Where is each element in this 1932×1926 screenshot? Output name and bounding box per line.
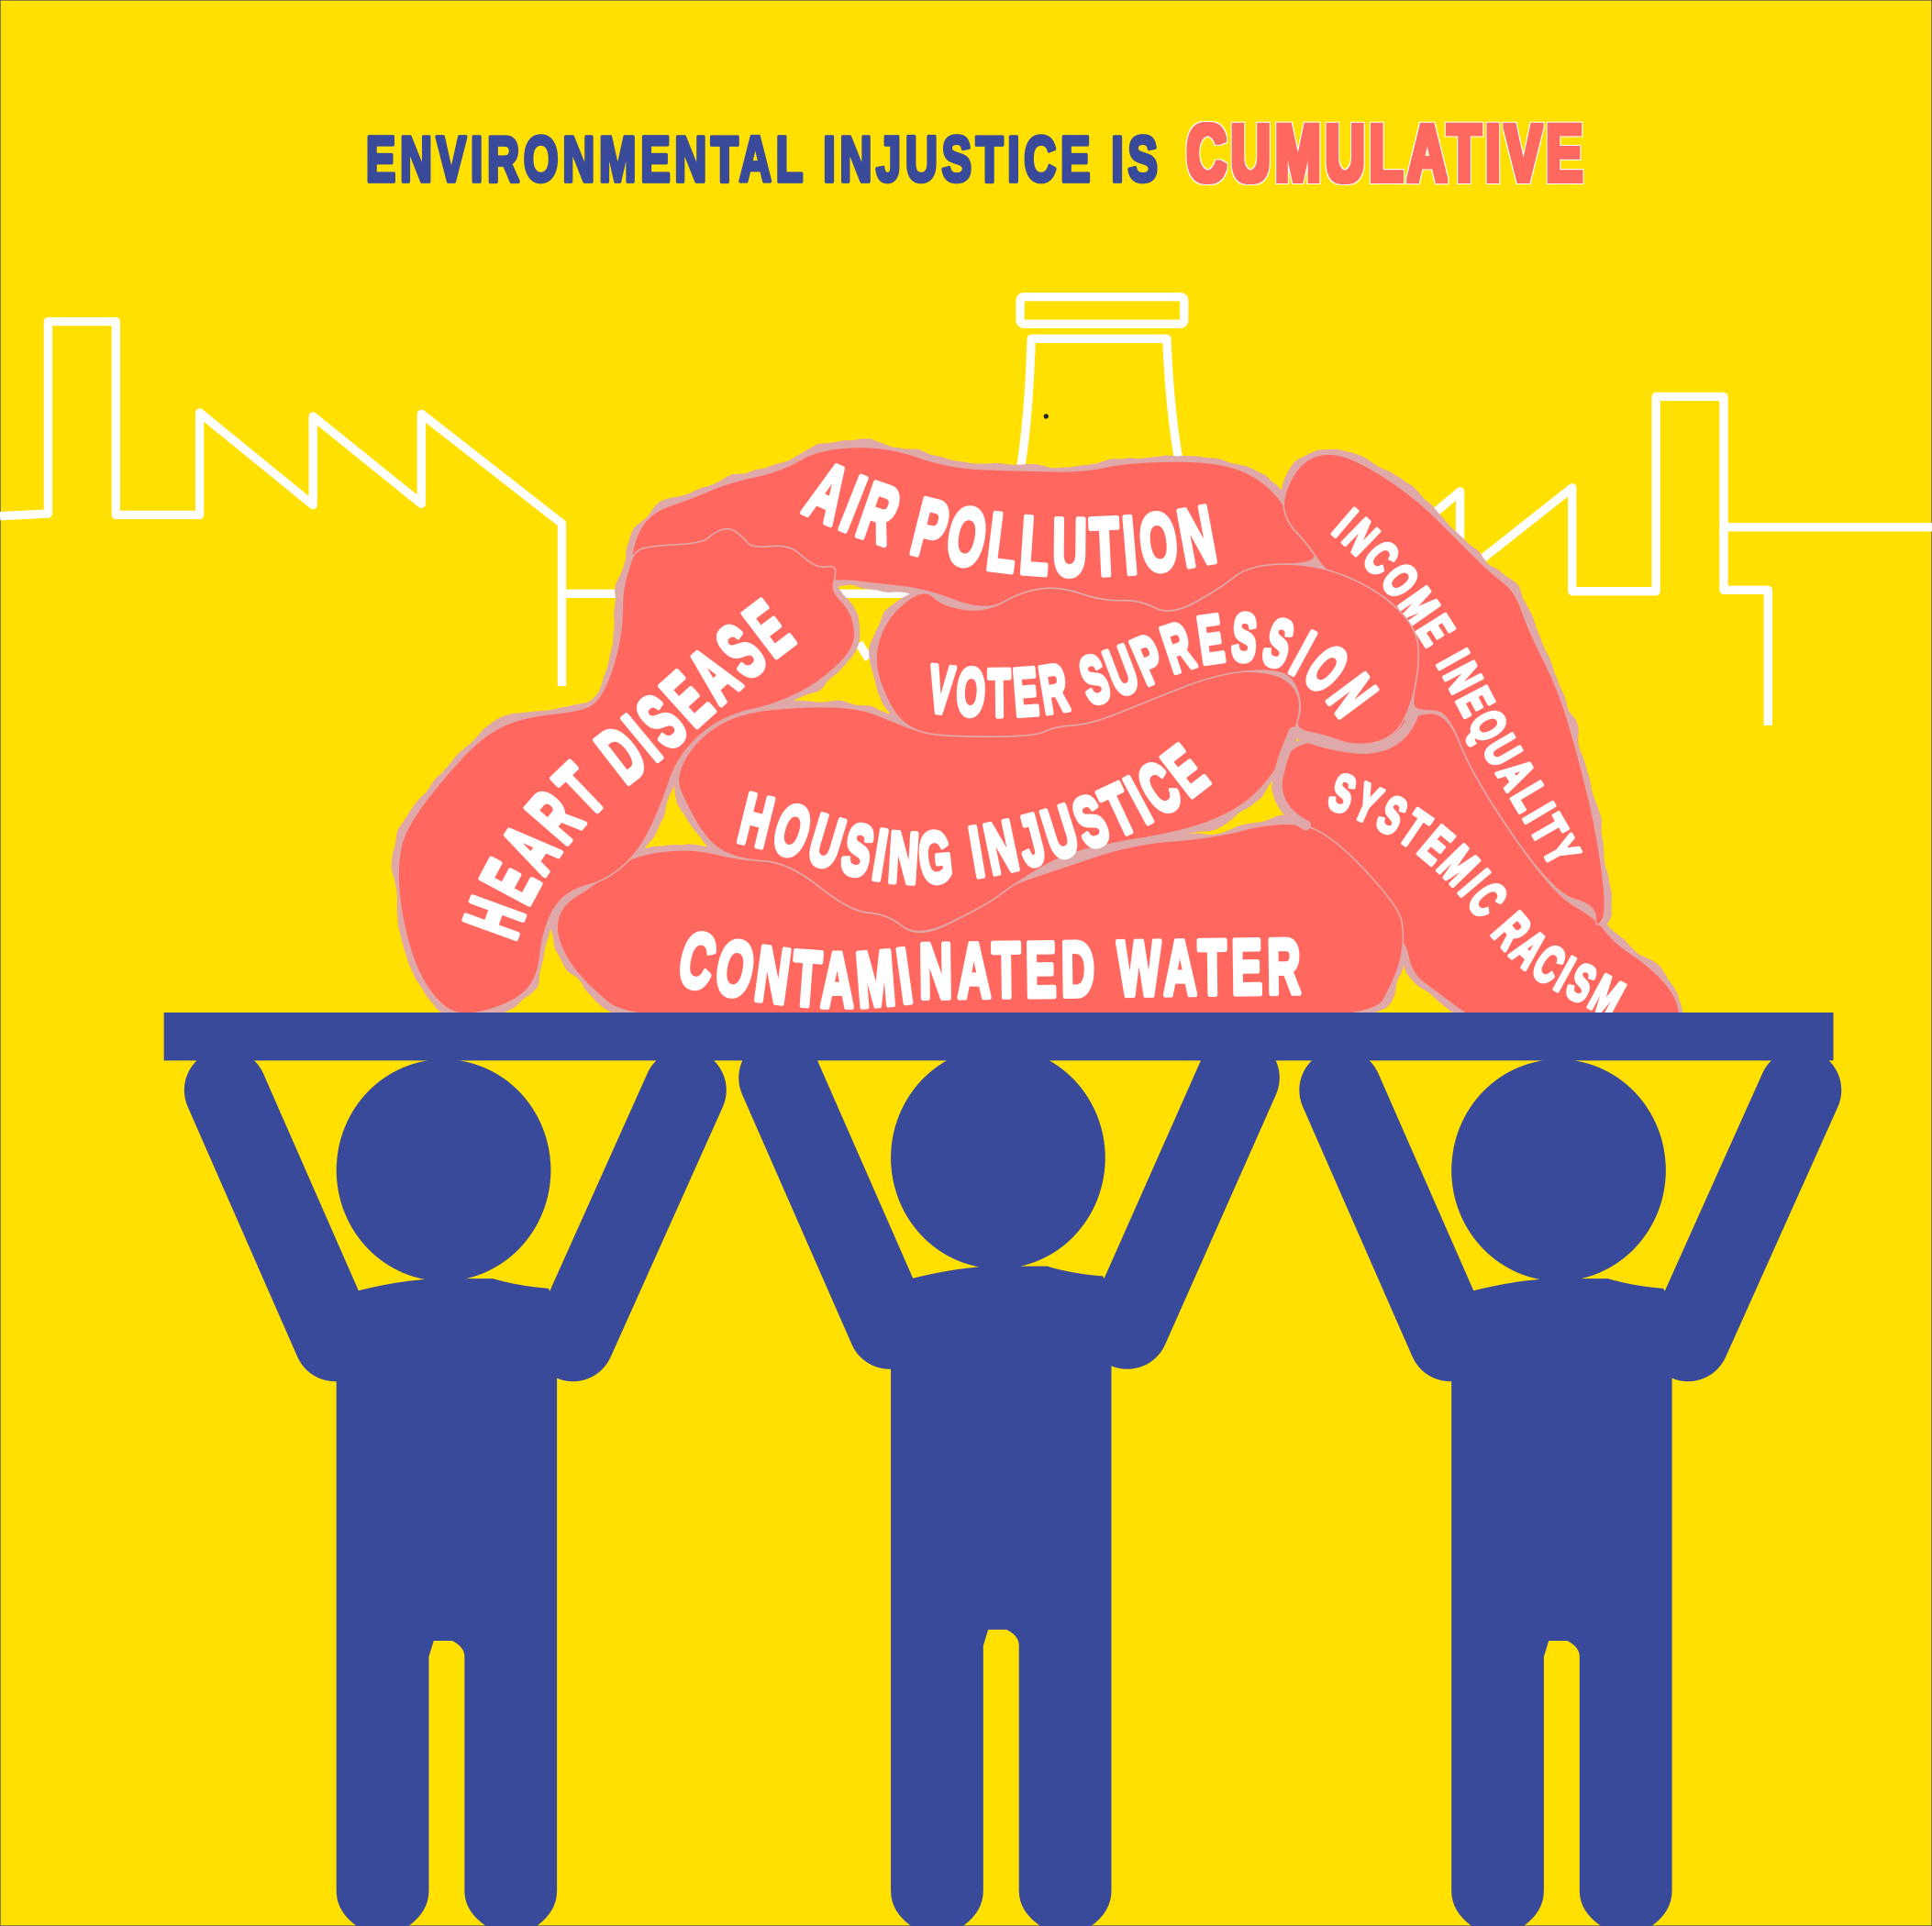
title: environmental injustice is: ENVIRONMENTAL INJUSTICE IS <box>366 123 1162 194</box>
blob: voter supression <box>877 563 1419 831</box>
blob: income inequality <box>1282 455 1604 925</box>
person 3 <box>1340 1059 1800 1926</box>
label: income inequality: INCOME INEQUALITY <box>1330 506 1583 862</box>
title <box>366 107 1587 198</box>
blob: contaminated water <box>558 825 1404 1013</box>
label: air pollution: AIR POLLUTION <box>800 463 1217 580</box>
title: cumulative: CUMULATIVE <box>1186 107 1587 198</box>
label: housing injustice: HOUSING INJUSTICE <box>737 741 1212 886</box>
label: voter supression: VOTER SUPRESSION <box>930 611 1380 720</box>
blob: air pollution <box>633 448 1315 611</box>
person 2 <box>780 1047 1238 1926</box>
label: heart disease: HEART DISEASE <box>461 597 798 941</box>
blob: housing injustice <box>679 671 1299 931</box>
label: systemic racism: SYSTEMIC RACISM <box>1328 772 1627 1013</box>
table slab <box>164 1013 1834 1060</box>
person 1 <box>226 1059 685 1926</box>
label: contaminated water: CONTAMINATED WATER <box>680 931 1302 1010</box>
blob: systemic racism <box>1282 714 1679 1013</box>
thick pink seam between voter, housing and systemic <box>1276 712 1415 825</box>
city skyline outline <box>0 297 1932 725</box>
rough pink blob outlines <box>398 447 1680 1028</box>
blob: heart disease <box>398 528 854 1013</box>
